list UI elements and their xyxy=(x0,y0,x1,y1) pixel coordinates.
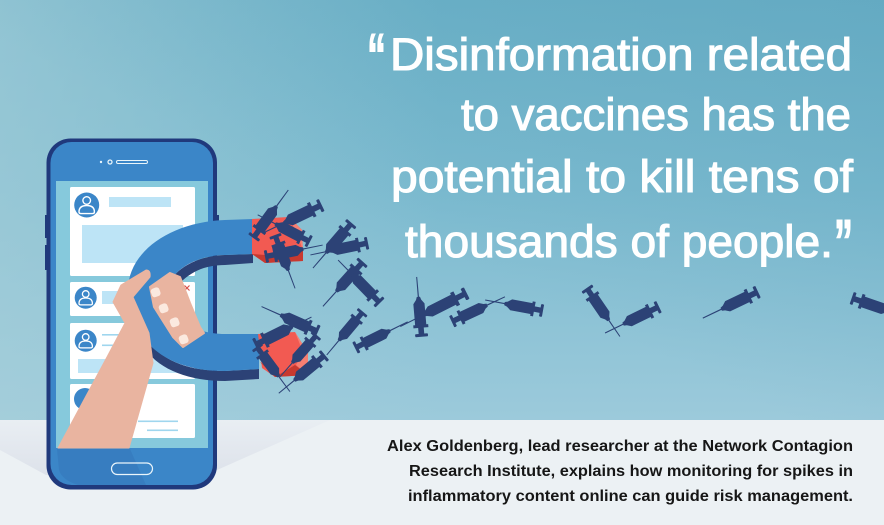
syringe xyxy=(321,307,368,359)
magnet blue body xyxy=(128,219,259,371)
caption line 1: Alex Goldenberg, lead researcher at the Network Contagion xyxy=(387,438,853,455)
syringe xyxy=(309,236,369,262)
syringe xyxy=(602,300,662,340)
arm and thumb xyxy=(58,270,153,448)
syringe xyxy=(307,218,357,273)
caption line 2: Research Institute, explains how monitoring for spikes in xyxy=(409,463,853,480)
syringe xyxy=(849,291,884,325)
syringe xyxy=(397,286,470,333)
avatar xyxy=(74,192,99,218)
syringe xyxy=(254,208,313,248)
quote line 4: thousands of people. xyxy=(405,216,833,267)
background: pale snow ground xyxy=(0,420,884,525)
phone home button xyxy=(112,463,152,474)
closing quotation mark: ” xyxy=(834,208,853,277)
syringe xyxy=(409,276,429,337)
syringe xyxy=(333,255,385,308)
finger nails xyxy=(150,287,189,345)
syringe xyxy=(251,343,295,396)
horseshoe magnet xyxy=(128,217,308,381)
syringe xyxy=(581,284,626,341)
syringe xyxy=(352,315,411,355)
syringe xyxy=(700,285,761,325)
avatar xyxy=(75,330,97,352)
avatar xyxy=(75,287,97,309)
syringe xyxy=(449,290,508,328)
opening quotation mark: “ xyxy=(367,22,386,91)
magnet inner shadow upper xyxy=(168,254,253,288)
caption xyxy=(387,438,853,505)
fingers xyxy=(150,273,204,347)
syringe xyxy=(264,238,324,264)
hand gripping magnet xyxy=(58,270,204,448)
syringe xyxy=(247,186,294,242)
arm shadow on phone xyxy=(57,449,146,485)
syringe xyxy=(274,349,330,399)
post card 4 xyxy=(70,384,195,438)
syringe xyxy=(268,232,302,291)
magnet red pole bottom xyxy=(258,332,308,377)
pull quote xyxy=(367,22,854,277)
phone screen xyxy=(56,181,208,448)
phone body xyxy=(46,138,217,490)
syringe xyxy=(258,300,321,339)
quote line 1: Disinformation related xyxy=(390,29,852,80)
syringe xyxy=(484,293,544,318)
caption line 3: inflammatory content online can guide risk management. xyxy=(408,488,853,505)
syringe xyxy=(275,330,322,382)
quote line 2: to vaccines has the xyxy=(461,89,851,140)
magnet shadow lower xyxy=(146,343,259,381)
post card 3 xyxy=(70,323,195,379)
post card 2 xyxy=(70,282,195,316)
quote line 3: potential to kill tens of xyxy=(391,151,854,202)
magnet red pole top xyxy=(252,217,303,263)
phone side buttons xyxy=(45,215,219,270)
phone speaker xyxy=(100,160,148,164)
syringes attracted by magnet xyxy=(247,186,884,399)
syringe xyxy=(317,257,369,311)
syringe xyxy=(252,310,315,352)
post card 1 xyxy=(70,187,195,276)
syringe xyxy=(261,198,325,239)
phone xyxy=(45,138,219,490)
